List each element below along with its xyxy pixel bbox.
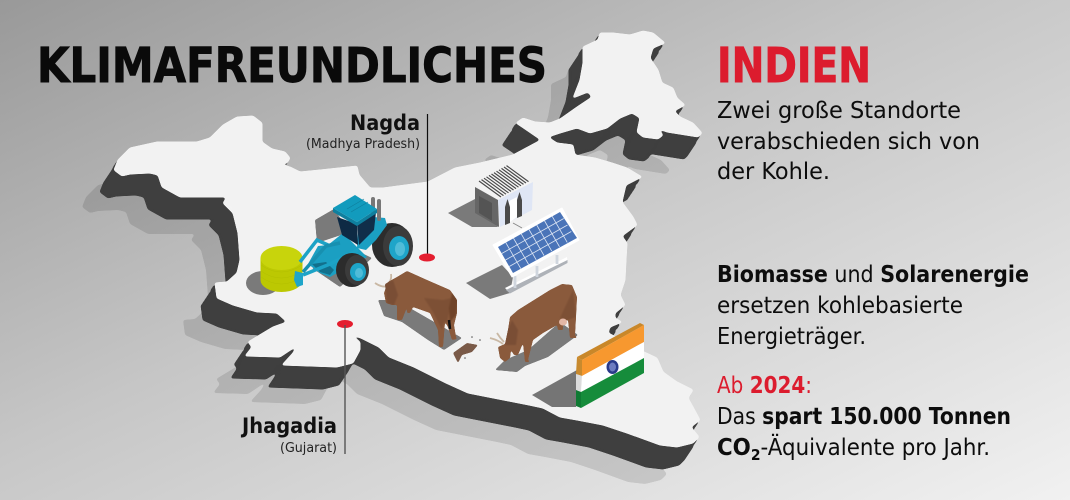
location marker: Jhagadia: (Gujarat)	[280, 441, 337, 456]
flag top edge	[577, 323, 644, 360]
title: Indien: INDIEN	[717, 38, 871, 94]
icon: dung	[453, 336, 481, 363]
biomass text: ersetzen kohlebasierte	[717, 293, 963, 319]
cow shadow	[495, 322, 578, 372]
flag chakra	[606, 360, 618, 374]
savings text: 2	[751, 446, 761, 464]
panel cells	[498, 212, 577, 273]
intro text: der Kohle.	[717, 159, 830, 185]
biomass text	[717, 262, 1029, 350]
savings text: -Äquivalente pro Jahr.	[761, 433, 990, 461]
cow horns	[490, 333, 504, 344]
intro text: Zwei große Standorte	[717, 98, 961, 124]
loader bracket	[294, 271, 303, 287]
icon: right cow	[490, 284, 578, 372]
icon: tractor with hay bale	[246, 195, 413, 295]
map extrusion	[100, 34, 700, 469]
building roof fins	[478, 165, 532, 198]
building left wall	[475, 187, 499, 227]
savings text: CO	[717, 435, 761, 464]
flag side	[576, 357, 582, 376]
cow tail	[449, 320, 450, 329]
map of India	[82, 31, 702, 484]
location marker: Jhagadia	[240, 320, 353, 456]
map cast shadow	[82, 68, 670, 484]
icon: solar panel	[466, 208, 579, 299]
location marker: Nagda: (Madhya Pradesh)	[306, 137, 420, 152]
savings text: Ab 2024:	[717, 373, 812, 399]
location marker: Jhagadia: Jhagadia	[240, 414, 337, 438]
location marker: Nagda: Nagda	[350, 111, 420, 135]
cow udder	[559, 318, 567, 326]
flag white stripe	[581, 342, 644, 392]
savings text	[717, 373, 1011, 464]
panel shadow	[466, 265, 513, 299]
cow shadow	[378, 300, 462, 350]
map top surface	[114, 31, 702, 447]
title: Klimafreundliches: KLIMAFREUNDLICHES	[37, 38, 547, 94]
panel frame	[493, 208, 579, 277]
tractor body	[294, 195, 387, 287]
biomass text: Energieträger.	[717, 324, 866, 350]
exhaust pipes	[373, 199, 379, 219]
panel legs	[515, 255, 557, 288]
hay bale shadow	[246, 271, 280, 295]
cow body	[498, 284, 577, 362]
intro text: verabschieden sich von	[717, 129, 980, 155]
cow body	[384, 271, 457, 347]
title	[37, 38, 871, 94]
cab roof	[333, 208, 377, 226]
flag saffron stripe	[582, 325, 644, 376]
icon: power plant building	[448, 165, 533, 228]
icon: left cow	[375, 271, 462, 350]
flag green stripe	[581, 358, 644, 408]
building shadow	[448, 199, 498, 227]
building right wall	[498, 182, 533, 227]
panel base	[505, 257, 568, 293]
building towers	[505, 199, 510, 225]
hay bale	[260, 246, 302, 292]
cab	[337, 217, 358, 245]
tractor shadow	[312, 209, 372, 287]
flag shadow	[532, 370, 577, 407]
location marker: Nagda	[306, 111, 435, 262]
icon: Indian flag	[532, 323, 644, 408]
cow horns	[375, 274, 391, 287]
front wheel	[336, 253, 369, 287]
rear wheel	[372, 223, 413, 267]
intro text	[717, 98, 980, 185]
savings text: Das spart 150.000 Tonnen	[717, 404, 1011, 430]
biomass text: Biomasse und Solarenergie	[717, 262, 1029, 288]
